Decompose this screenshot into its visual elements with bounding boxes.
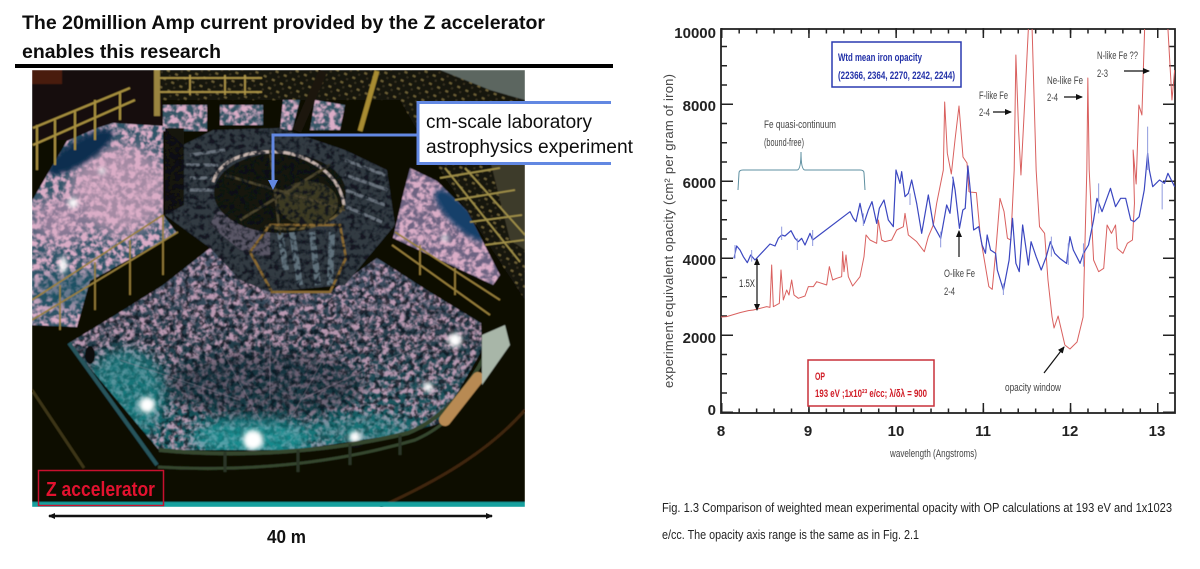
y axis values: 2000 — [683, 330, 716, 347]
legend: weighted mean iron opacity — [832, 42, 961, 87]
panel: Z accelerator photograph — [32, 70, 525, 507]
callout text — [426, 112, 634, 158]
x axis values: 12 — [1062, 423, 1078, 440]
blue error bars, long wavelengths — [1003, 127, 1162, 295]
photo: top pink floor patches — [162, 99, 346, 132]
annotation: Fe quasi-continuum: (bound-free) — [764, 137, 804, 149]
photo: silhouette of person — [85, 346, 95, 364]
photo: walkways and railings — [32, 70, 525, 507]
callout: cm-scale experiment — [268, 102, 634, 190]
annotation: opacity window — [1005, 347, 1064, 394]
legend: weighted mean iron opacity: Wtd mean iron opacity — [838, 52, 923, 64]
scale arrow: 40 m: 40 m — [267, 527, 306, 547]
bracket — [738, 152, 865, 190]
annotation: F-like Fe — [979, 90, 1011, 119]
annotation: F-like Fe: F-like Fe — [979, 90, 1008, 102]
curves — [721, 3, 1175, 349]
annotation: opacity window: opacity window — [1005, 382, 1061, 394]
y axis values: 10000 — [674, 25, 716, 42]
photo: teal bottom strip — [32, 502, 525, 507]
annotation: 1.5X gap: 1.5X — [739, 278, 755, 290]
Z accelerator label — [38, 470, 164, 506]
y axis values: 0 — [708, 402, 716, 419]
Z accelerator label: Z accelerator — [46, 479, 155, 501]
callout leader and arrow — [273, 102, 611, 184]
photo: central machine deck — [165, 125, 400, 295]
callout text: astrophysics experiment — [426, 137, 634, 158]
title rule — [15, 64, 613, 68]
photo: wall panels on lower right — [482, 325, 510, 385]
photo: bright discharge spots — [59, 168, 462, 450]
annotation: 1.5X gap — [739, 259, 757, 310]
annotation: Ne-like Fe: 2-4 — [1047, 92, 1058, 104]
annotation: Ne-like Fe: Ne-like Fe — [1047, 75, 1083, 87]
legend: OP calculation — [808, 360, 934, 406]
chart: opacity versus wavelength — [661, 3, 1175, 460]
red OP curve, short wavelengths — [721, 102, 969, 317]
annotation: O-like Fe: O-like Fe — [944, 268, 975, 280]
annotation: F-like Fe: 2-4 — [979, 107, 990, 119]
deck texture — [165, 125, 400, 295]
legend: OP calculation: 193 eV ;1x10²³ e/cc; λ/δλ = 900 — [815, 388, 927, 400]
y axis values: 6000 — [683, 175, 716, 192]
annotation: O-like Fe — [944, 231, 975, 298]
legend: weighted mean iron opacity: (22366, 2364, 2270, 2242, 2244) — [838, 70, 955, 82]
photo: left pink floor — [32, 120, 182, 330]
annotation: N-like Fe: 2-3 — [1097, 68, 1108, 80]
annotation: Fe quasi-continuum — [738, 119, 865, 190]
callout arrowhead — [268, 180, 278, 190]
annotation: O-like Fe: 2-4 — [944, 286, 955, 298]
x axis values: 9 — [804, 423, 812, 440]
annotation: Ne-like Fe — [1047, 75, 1083, 104]
x axis values: 8 — [717, 423, 725, 440]
blue error bars, short wavelengths — [735, 193, 941, 262]
title: The 20million Amp current provided by the Z accelerator — [22, 12, 545, 34]
x axis values — [717, 423, 1165, 440]
title: enables this research — [22, 41, 221, 63]
y axis values: 4000 — [683, 252, 716, 269]
figure caption — [662, 500, 1172, 542]
x axis values: 13 — [1149, 423, 1165, 440]
figure caption: e/cc. The opacity axis range is the same as in Fig. 2.1 — [662, 527, 919, 542]
photo: right pink floor — [390, 165, 505, 290]
plot frame and ticks — [721, 28, 1175, 413]
blue measured curve, short wavelengths — [734, 170, 953, 263]
y axis title: experiment equivalent opacity (cm² per gram of iron) — [661, 74, 676, 388]
annotation: N-like Fe: N-like Fe ?? — [1097, 50, 1138, 62]
x axis title: wavelength (Angstroms) — [889, 448, 977, 460]
callout text: cm-scale laboratory — [426, 112, 592, 133]
photo: upper background tones — [32, 70, 525, 300]
photo: lower glowing floor — [60, 245, 490, 460]
red OP curve, long wavelengths — [953, 3, 1175, 349]
x axis values: 10 — [888, 423, 904, 440]
blue measured curve, long wavelengths — [953, 153, 1175, 290]
x axis values: 11 — [975, 423, 991, 440]
y axis values — [674, 25, 716, 419]
y axis values: 8000 — [683, 98, 716, 115]
annotation: Fe quasi-continuum: Fe quasi-continuum — [764, 119, 836, 131]
legend: OP calculation: OP — [815, 371, 825, 383]
title — [22, 12, 545, 63]
annotation: N-like Fe — [1097, 50, 1149, 80]
photo: beige pipe on lower right — [445, 378, 478, 420]
